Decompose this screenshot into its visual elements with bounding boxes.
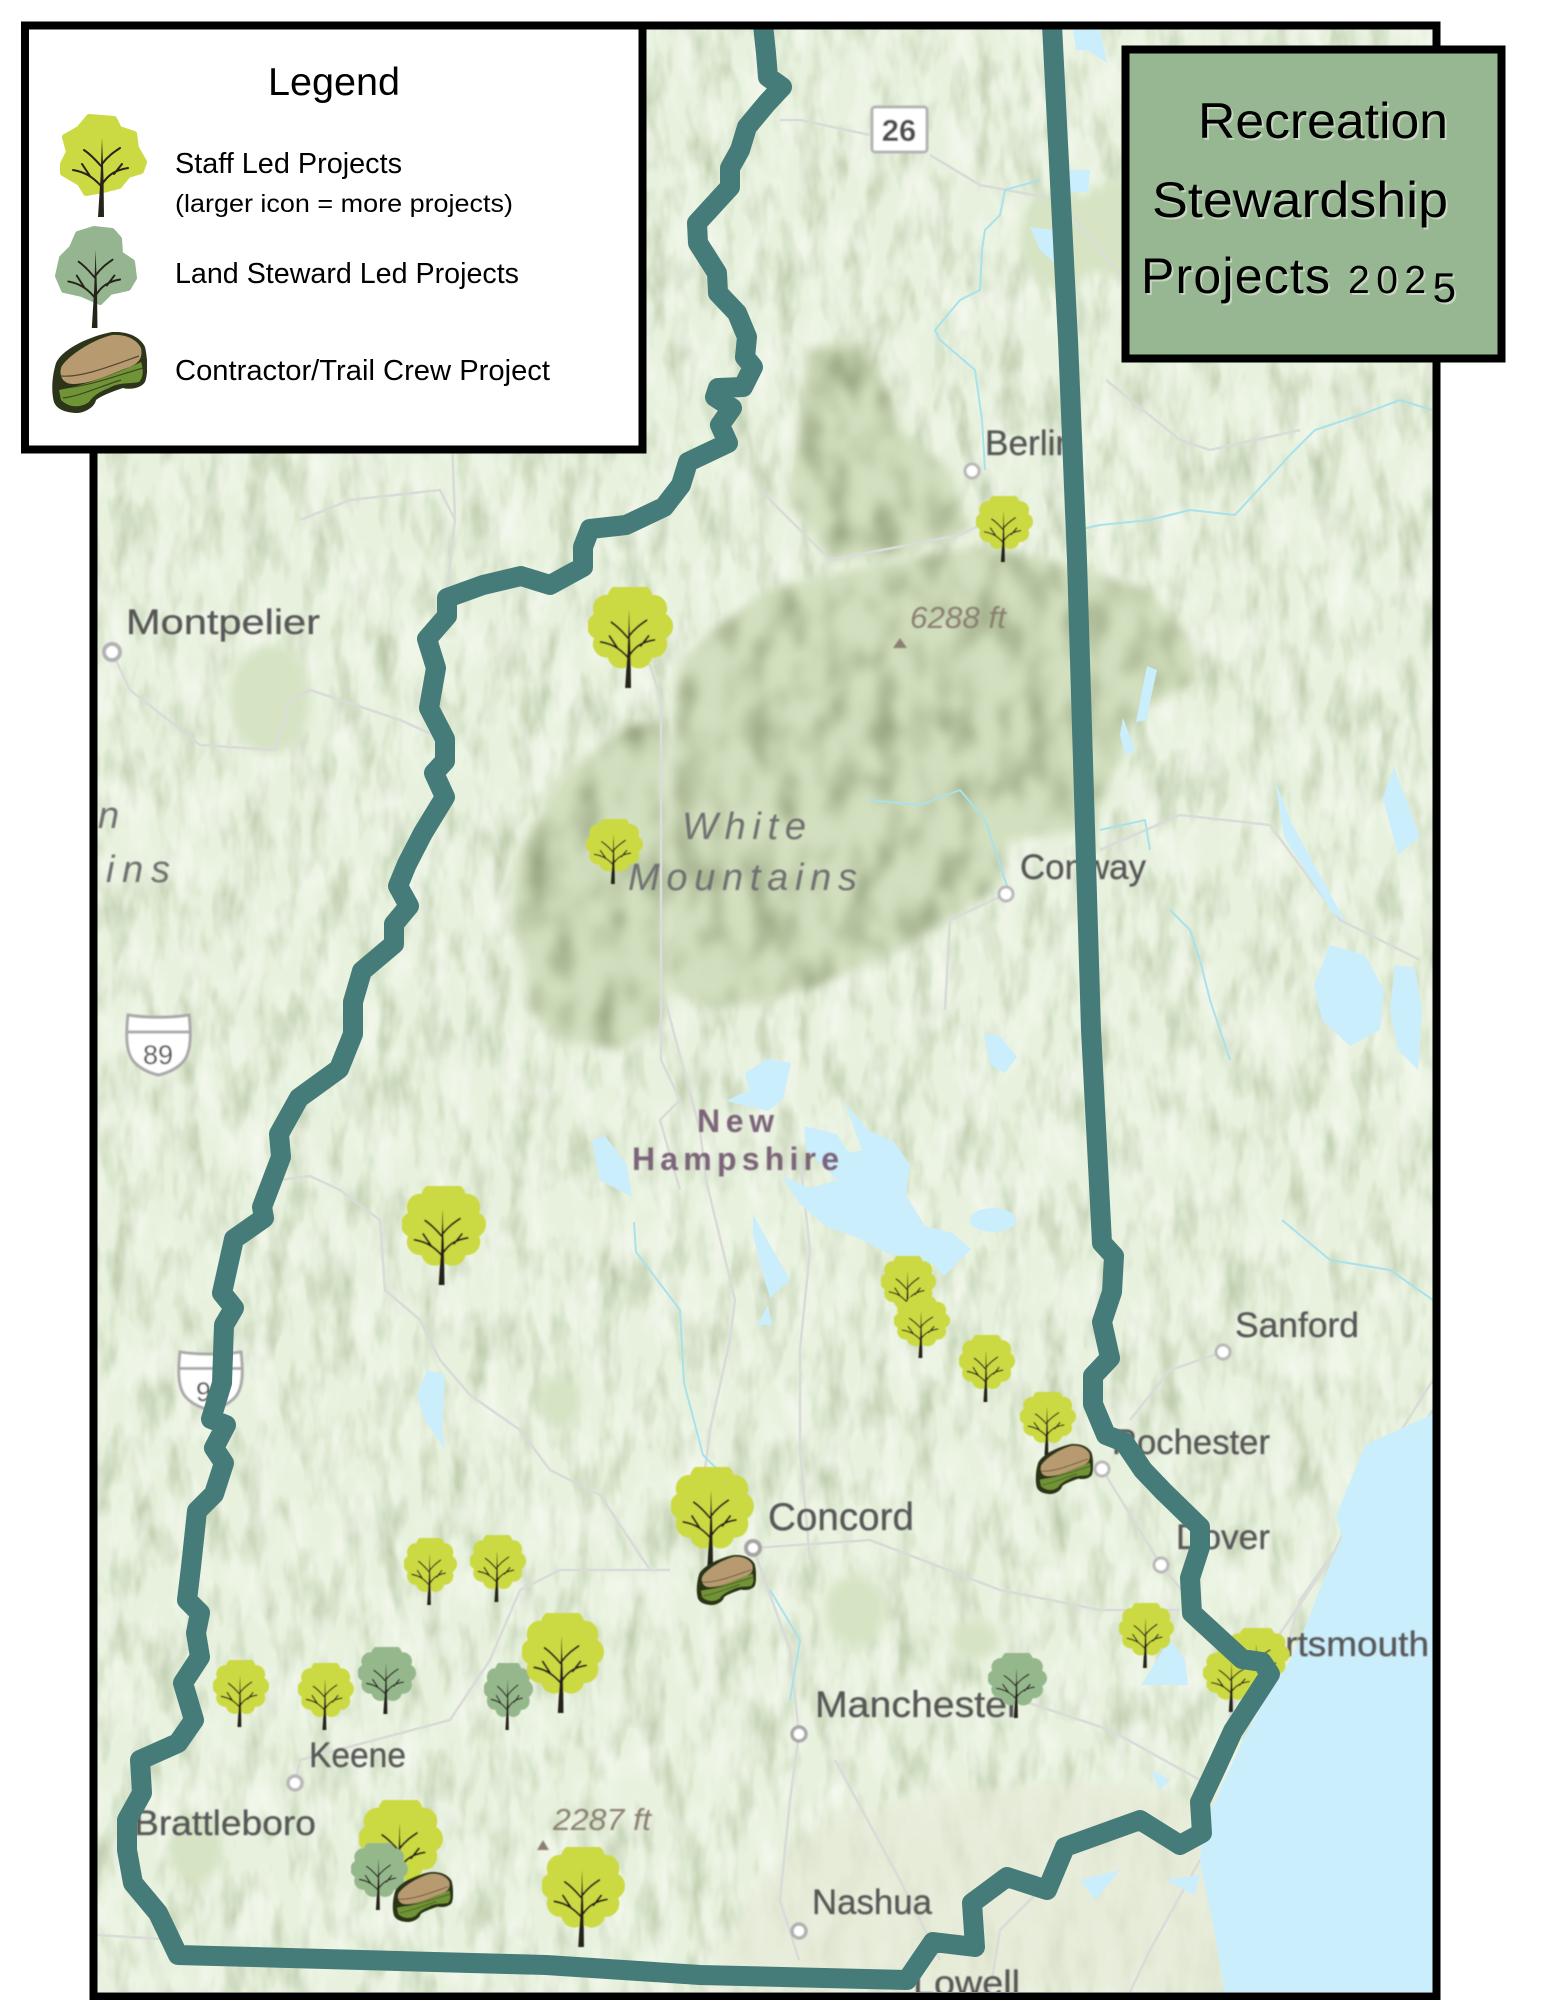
label: 6288 ft: 6288 ft	[910, 600, 1007, 635]
icon: staff led tree	[63, 117, 144, 217]
icon: staff tree, Seacoast lower	[1202, 1646, 1262, 1712]
icon: staff tree, Seacoast upper	[1224, 1626, 1290, 1695]
icon: staff tree, White Mountains	[585, 817, 643, 884]
label: Hampshire: Hampshire	[632, 1141, 839, 1177]
label: Green Mountains fragment: ins	[106, 849, 170, 891]
label: Manchester: Manchester	[815, 1684, 1020, 1725]
marker: summit	[537, 1840, 549, 1850]
route shield: 89	[127, 1015, 190, 1075]
label: Nashua: Nashua	[812, 1883, 933, 1922]
city marker: Montpelier	[104, 644, 120, 660]
panel: legend	[25, 26, 642, 450]
legend entry: staff led projects: Staff Led Projects	[175, 148, 402, 180]
icon: staff tree, Cheshire 2	[297, 1661, 354, 1730]
icon: staff tree, Berlin	[975, 494, 1033, 562]
label: White: White	[682, 806, 806, 848]
panel: title	[1126, 50, 1502, 358]
scattered forest patches	[170, 180, 1190, 1884]
southern urban tint	[710, 1780, 1222, 1992]
icon: staff tree, Lakes 3	[958, 1333, 1015, 1402]
label: Keene: Keene	[309, 1736, 406, 1775]
icon: steward tree, Cheshire	[357, 1645, 416, 1714]
icon: staff tree, Concord	[670, 1464, 754, 1568]
legend entry: land steward led projects: Land Steward Led Projects	[175, 258, 519, 290]
icon: land steward tree	[58, 229, 134, 328]
icon: staff tree, Monadnock	[358, 1797, 443, 1900]
city marker: Rochester	[1095, 1462, 1109, 1476]
marker: summit	[893, 638, 907, 648]
project icons	[212, 494, 1290, 1947]
ocean	[1200, 1414, 1433, 1992]
label: 2287 ft: 2287 ft	[552, 1802, 652, 1837]
icon: staff tree, Sullivan 1	[403, 1536, 457, 1605]
route shield: 26	[872, 107, 927, 152]
route shield: 26: 26	[882, 113, 916, 148]
lakes and ponds	[417, 30, 1422, 1900]
label: Sanford: Sanford	[1235, 1306, 1359, 1345]
label: Conway: Conway	[1020, 848, 1146, 887]
label: Green Mountains fragment: n	[98, 795, 119, 837]
title text	[1141, 93, 1456, 311]
icon: staff tree, Hillsborough	[521, 1610, 604, 1713]
route shield: 91: 91	[196, 1377, 226, 1407]
route shield: 89: 89	[143, 1040, 173, 1070]
label: Mountains: Mountains	[628, 857, 857, 899]
icon: staff tree, Lakes 1	[880, 1254, 936, 1322]
title text: Stewardship	[1152, 172, 1448, 228]
label: Berlin: Berlin	[985, 424, 1075, 463]
icon: staff tree, Sullivan 2	[469, 1533, 526, 1602]
city marker: Sanford	[1216, 1345, 1230, 1359]
icon: staff tree, northern	[587, 584, 673, 688]
icon: steward tree, Monadnock	[350, 1841, 408, 1910]
icon: staff tree, Cheshire 1	[212, 1658, 269, 1727]
icon: contractor rock	[52, 332, 147, 413]
icon: staff tree, Rochester	[1019, 1390, 1076, 1455]
legend heading: Legend	[268, 61, 400, 104]
label: Rochester: Rochester	[1112, 1423, 1270, 1462]
city marker: Nashua	[792, 1924, 806, 1938]
title text: Projects	[1141, 248, 1331, 304]
title text: 202	[1348, 259, 1433, 302]
city marker: Dover	[1154, 1558, 1168, 1572]
legend note: icon size: (larger icon = more projects)	[175, 190, 513, 218]
city marker: Concord	[746, 1541, 760, 1555]
icon: contractor rock, Rochester	[1036, 1444, 1093, 1494]
state boundary line	[127, 25, 1270, 1980]
label: Montpelier: Montpelier	[126, 603, 320, 642]
city marker: Manchester	[792, 1727, 806, 1741]
icon: contractor rock, Monadnock	[393, 1872, 453, 1922]
icon: contractor rock, Concord	[697, 1555, 756, 1605]
icon: staff tree, Great Bay	[1118, 1601, 1174, 1668]
icon: steward tree, Sullivan	[483, 1661, 533, 1730]
city marker: Conway	[999, 887, 1013, 901]
icon: staff tree, central west	[401, 1183, 486, 1285]
label: Portsmouth: Portsmouth	[1240, 1625, 1429, 1664]
label: Brattleboro: Brattleboro	[134, 1804, 316, 1843]
title text: Recreation	[1198, 93, 1448, 149]
label: Dover: Dover	[1176, 1518, 1270, 1557]
route shield: 91	[179, 1352, 242, 1410]
icon: staff tree, Lakes 2	[893, 1295, 950, 1358]
white mountains relief	[500, 330, 1220, 1060]
icon: staff tree, Wapack	[541, 1844, 625, 1947]
label: New: New	[697, 1103, 774, 1139]
city marker: Berlin	[965, 464, 979, 478]
label: Concord: Concord	[768, 1496, 914, 1539]
rivers	[634, 180, 1433, 1700]
city marker: Keene	[288, 1776, 302, 1790]
icon: steward tree, Manchester east	[987, 1651, 1047, 1718]
title text: 5	[1433, 264, 1456, 311]
legend entry: contractor trail crew: Contractor/Trail Crew Project	[175, 355, 550, 387]
